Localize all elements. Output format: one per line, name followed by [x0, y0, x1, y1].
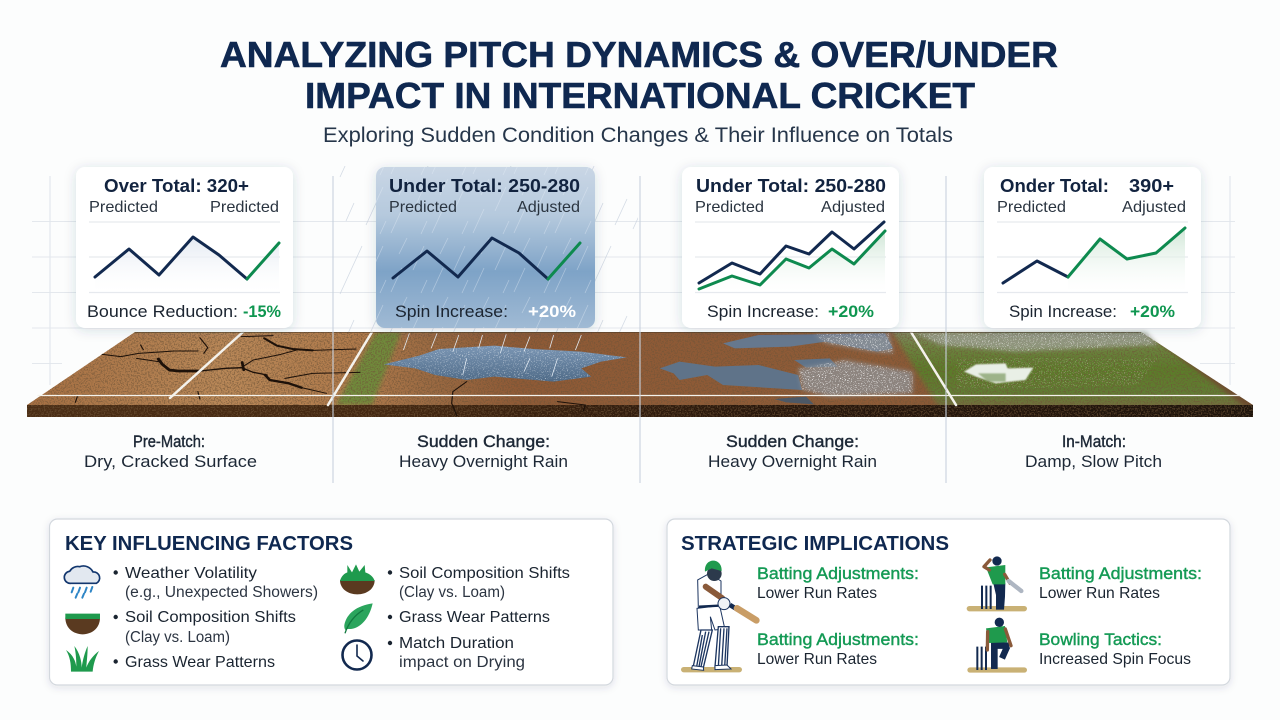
bullet item: soil composition 2 [388, 565, 570, 601]
bullet item: grass wear 2: Grass Wear Patterns [399, 609, 550, 626]
line chart [1003, 228, 1185, 283]
panel: card 3 under total: Spin Increase: [707, 302, 819, 321]
icon: soil and grass [340, 564, 375, 594]
pitch front soil edge [27, 405, 1253, 417]
title: IMPACT IN INTERNATIONAL CRICKET [305, 75, 975, 116]
panel: card 3 under total: +20% [828, 302, 874, 321]
caption: pre-match [84, 433, 257, 471]
section dividers [333, 176, 946, 483]
panel: card 1 over total: Predicted [89, 199, 158, 216]
implication: batting adjustments right: Batting Adjustments: [1039, 565, 1202, 583]
caption: in-match: Damp, Slow Pitch [1025, 453, 1162, 471]
panel: key influencing factors [50, 519, 613, 685]
bullet item: weather volatility: Weather Volatility [125, 565, 257, 582]
bullet item: match duration: impact on Drying [399, 654, 525, 671]
implication: bowling tactics [1039, 631, 1191, 668]
title [220, 34, 1058, 116]
bullet item: soil composition 2: Soil Composition Shifts [399, 565, 570, 582]
implication: batting adjustments right [1039, 565, 1202, 602]
bullet item: weather volatility [114, 565, 318, 601]
panel: card 2 under total rain: Predicted [389, 199, 457, 216]
rain streaks behind the second card [338, 166, 638, 346]
panel: card 1 over total: Over Total: 320+ [104, 176, 249, 196]
implication: bowling tactics: Increased Spin Focus [1039, 651, 1191, 668]
soil grain [27, 332, 1253, 417]
caption: pre-match: Pre-Match: [133, 433, 205, 451]
caption: sudden change 1: Heavy Overnight Rain [399, 453, 568, 471]
grass outfield right [892, 332, 1245, 405]
panel: card 4 onder total: Predicted [997, 199, 1066, 216]
panel: card 4 onder total: Spin Increase: [1009, 302, 1117, 321]
panel: card 2 under total rain: +20% [528, 302, 576, 321]
icon: rain cloud [64, 566, 100, 598]
implication: batting adjustments left bottom: Lower Run Rates [757, 651, 877, 668]
panel: card 3 under total: Adjusted [821, 199, 885, 216]
bullet item: soil composition 2: (Clay vs. Loam) [399, 584, 505, 601]
panel: card 1 over total: Predicted [210, 199, 279, 216]
panel: card 3 under total: Predicted [695, 199, 764, 216]
panel: card 3 under total: Under Total: 250-280 [696, 176, 886, 196]
panel: card 1 over total [76, 167, 293, 328]
caption: in-match [1025, 433, 1162, 471]
panel: card 4 onder total: 390+ [1129, 176, 1174, 196]
icon: soil [65, 614, 100, 634]
implication: bowling tactics: Bowling Tactics: [1039, 631, 1162, 649]
icon: bowler with stumps [967, 618, 1027, 673]
caption: sudden change 1 [399, 433, 568, 471]
panel: card 4 onder total [984, 167, 1201, 328]
panel: card 4 onder total: Adjusted [1122, 199, 1186, 216]
caption: sudden change 2: Sudden Change: [726, 433, 859, 451]
line chart [393, 238, 580, 279]
panel: card 2 under total rain [376, 167, 595, 328]
icon: leaf [344, 603, 373, 633]
background chart grid [32, 176, 1235, 385]
bullet item: weather volatility: (e.g., Unexpected Showers) [125, 584, 318, 601]
implication: batting adjustments left bottom: Batting Adjustments: [757, 631, 919, 649]
drying water patches [660, 332, 1158, 404]
icon: clock [342, 640, 372, 670]
line chart [95, 237, 279, 279]
bullet item: match duration: Match Duration [399, 635, 514, 652]
title: ANALYZING PITCH DYNAMICS & OVER/UNDER [220, 34, 1058, 75]
bullet item: soil composition [114, 609, 296, 646]
implication: batting adjustments left top: Batting Adjustments: [757, 565, 919, 583]
crease lines [38, 332, 1240, 405]
bullet item: match duration [388, 635, 525, 671]
caption: in-match: In-Match: [1062, 433, 1126, 451]
heading: KEY INFLUENCING FACTORS [65, 533, 353, 555]
implication: batting adjustments left top: Lower Run Rates [757, 585, 877, 602]
panel: card 2 under total rain: Spin Increase: [395, 302, 508, 321]
bullet item: soil composition: (Clay vs. Loam) [125, 629, 230, 646]
panel: card 3 under total [682, 167, 899, 328]
caption: sudden change 1: Sudden Change: [417, 433, 550, 451]
implication: batting adjustments right: Lower Run Rates [1039, 585, 1160, 602]
caption: sudden change 2: Heavy Overnight Rain [708, 453, 877, 471]
grass strip left [336, 332, 401, 405]
pitch cross-section [27, 325, 1253, 417]
panel: strategic implications [667, 519, 1230, 685]
panel: card 1 over total: -15% [243, 302, 281, 321]
panel: card 2 under total rain: Adjusted [517, 199, 580, 216]
panel: card 4 onder total: +20% [1130, 302, 1175, 321]
implication: batting adjustments left top [757, 565, 919, 602]
subtitle: Exploring Sudden Condition Changes & Their Influence on Totals [323, 124, 953, 147]
panel: card 1 over total: Bounce Reduction: [87, 302, 238, 321]
bullet item: grass wear: Grass Wear Patterns [125, 654, 275, 671]
implication: batting adjustments left bottom [757, 631, 919, 668]
icon: grass [66, 646, 99, 672]
icon: batter [681, 561, 756, 672]
pitch top surface [27, 332, 1253, 405]
panel: card 4 onder total: Onder Total: [1000, 176, 1109, 196]
puddle on pitch [384, 333, 627, 382]
bullet item: soil composition: Soil Composition Shifts [125, 609, 296, 626]
icon: batter with stumps [967, 556, 1027, 611]
line chart [699, 222, 885, 289]
top edge shadow [135, 332, 1141, 334]
caption: pre-match: Dry, Cracked Surface [84, 453, 257, 471]
caption: sudden change 2 [708, 433, 877, 471]
heading: STRATEGIC IMPLICATIONS [681, 533, 949, 555]
panel: card 2 under total rain: Under Total: 250-280 [389, 176, 580, 196]
cracks on dry surface [75, 336, 585, 416]
